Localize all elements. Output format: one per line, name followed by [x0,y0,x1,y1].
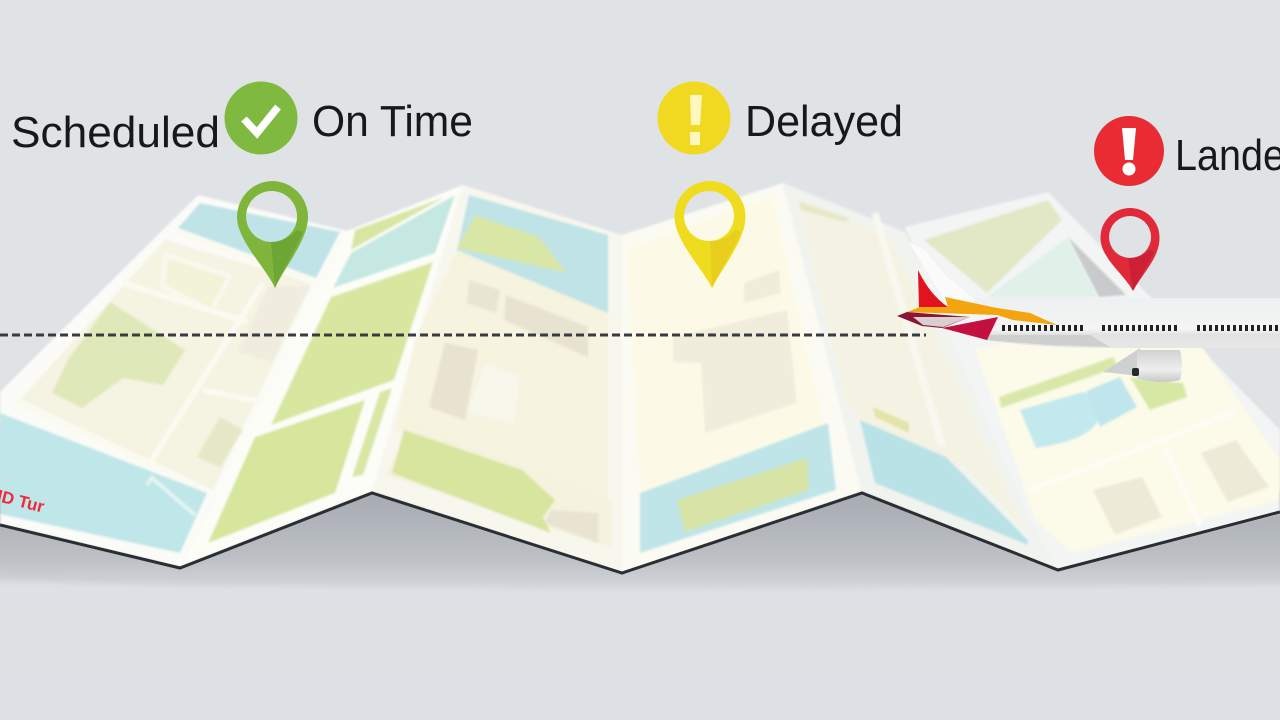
plane engine [1132,350,1182,382]
plane fuselage [975,298,1280,348]
plane orange stripe [907,297,1057,325]
plane tail fin [918,270,948,308]
plane white plume [908,242,975,314]
status: on time label: On Time [312,97,473,146]
plane stabilizer tip [897,312,970,328]
folded map [0,183,1280,573]
dashed flight path [0,334,926,336]
icon: delayed warning [658,82,730,154]
airplane [897,242,1280,382]
pin: delayed [674,181,746,288]
icon: on time check [224,82,298,154]
panel 2 of map [180,185,463,567]
status: delayed label: Delayed [745,97,903,146]
plane engine pylon [1103,348,1140,376]
icon: landed alert [1094,116,1164,186]
panel 1 of map [0,195,347,567]
panel 4 of map [622,183,862,573]
plane lower tail shading [985,335,1110,347]
map shadow [0,490,1280,590]
pin: landed [1100,208,1160,291]
panel 5 of map [783,183,1058,570]
pin: on time [237,181,308,288]
status: scheduled label: Scheduled [11,108,220,157]
plane red stabilizer [942,317,998,340]
plane windows [1002,325,1280,331]
map bottom edge [0,493,1280,573]
panel 6 of map [905,192,1280,570]
panel 3 of map [372,185,622,573]
